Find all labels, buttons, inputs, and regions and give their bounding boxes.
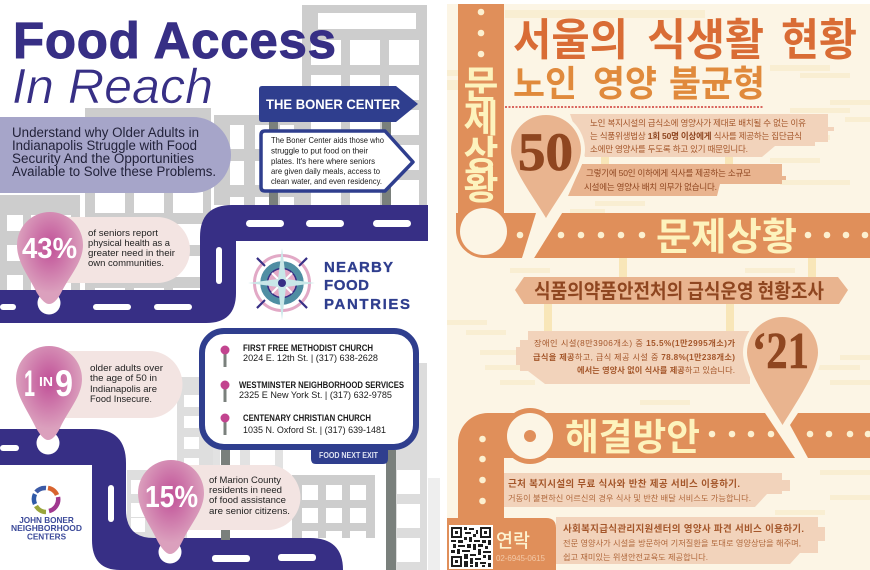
heading: nearby food pantries: PANTRIES xyxy=(324,296,410,313)
pantry: Centenary: 1035 N. Oxford St. | (317) 639-1481 xyxy=(243,425,386,436)
vertical heading: 상 xyxy=(464,124,498,179)
pin: '21 xyxy=(747,317,818,425)
info box: 2021 survey: 급식을 제공하고, 급식 제공 시설 중 78.8%(1만238개소) xyxy=(533,352,735,362)
sign: Boner Center description: are given daily meals, access to xyxy=(271,166,380,176)
logo: John Boner Neighborhood Centers xyxy=(11,488,82,542)
pantry: Westminster: WESTMINSTER NEIGHBORHOOD SERVICES xyxy=(239,380,404,391)
solution box: nearby facilities: 근처 복지시설의 무료 식사와 반찬 제공 서비스 이용하기. xyxy=(508,478,740,490)
solution box: dietitian dispatch xyxy=(556,517,825,564)
intro callout: Indianapolis Struggle with Food xyxy=(12,138,197,153)
stat: 1 in 9: 1 xyxy=(24,363,35,404)
contact block: 02-6945-0615 xyxy=(496,554,546,563)
info box: 2021 survey xyxy=(516,331,750,384)
intro callout xyxy=(0,117,231,193)
sign: The Boner Center: THE BONER CENTER xyxy=(266,96,400,112)
vertical heading: 문 xyxy=(464,54,498,109)
title: 영양 xyxy=(593,55,657,107)
title: In Reach xyxy=(12,60,213,114)
stat: 1 in 9: the age of 50 in xyxy=(90,373,157,384)
background city buildings xyxy=(0,5,440,570)
solution box: dietitian dispatch: 사회복지급식관리지원센터의 영양사 파견 서비스 이용하기. xyxy=(563,523,804,535)
road: upper xyxy=(0,205,428,323)
road heading: 해결방안: 해결방안 xyxy=(565,407,700,461)
solution box: nearby facilities: 거동이 불편하신 어르신의 경우 식사 및 반찬 배달 서비스도 가능합니다. xyxy=(508,493,751,503)
info box: 50-person rule: 노인 복지시설의 급식소에 영양사가 제대로 배치될 수 없는 이유 xyxy=(590,118,806,128)
info box: small facilities: 그렇기에 50인 이하에게 식사를 제공하는 소규모 xyxy=(586,168,751,178)
road: problem section xyxy=(456,4,870,258)
pantry: Westminster xyxy=(220,380,404,402)
stat: 1 in 9: Indianapolis are xyxy=(90,384,157,395)
pin: '21: ‘21 xyxy=(752,323,809,380)
title xyxy=(12,12,336,114)
logo: John Boner Neighborhood Centers: NEIGHBORHOOD xyxy=(11,524,82,533)
solution box: dietitian dispatch: 쉽고 재미있는 위생안전교육도 제공합니다. xyxy=(563,552,708,562)
heading: nearby food pantries: FOOD xyxy=(324,277,369,294)
compass icon xyxy=(248,248,315,320)
intro callout: Understand why Older Adults in xyxy=(12,125,199,140)
road: solution section xyxy=(458,408,870,520)
stat: 15%: are senior citizens. xyxy=(209,506,290,517)
stat: 43%: physical health as a xyxy=(88,238,171,249)
intro callout: Available to Solve these Problems. xyxy=(12,164,216,179)
sign: Boner Center description: struggle to put food on their xyxy=(271,146,368,156)
pantry: First Free Methodist: FIRST FREE METHODIST CHURCH xyxy=(243,343,373,354)
info box: 2021 survey: 에서는 영양사 없이 식사를 제공하고 있습니다. xyxy=(577,365,735,375)
pin: 50 xyxy=(511,115,581,258)
dotted divider xyxy=(505,106,764,108)
stat: 43%: own communities. xyxy=(88,258,164,269)
intro callout: Security And the Opportunities xyxy=(12,151,194,166)
logo: John Boner Neighborhood Centers: JOHN BONER xyxy=(19,516,74,525)
vertical heading xyxy=(464,54,498,210)
sign: Boner Center description: The Boner Center aids those who xyxy=(271,135,384,145)
background streaks xyxy=(447,10,870,515)
pin: 50: 50 xyxy=(518,122,573,182)
road: lower xyxy=(0,429,343,570)
info box: small facilities: 시설에는 영양사 배치 의무가 없습니다. xyxy=(584,182,717,192)
title: 서울의 xyxy=(513,4,628,68)
title: 불균형 xyxy=(669,55,765,107)
pantry: Centenary xyxy=(220,413,386,436)
info box: small facilities xyxy=(568,164,786,196)
stat: 43%: of seniors report xyxy=(88,228,158,239)
solution box: dietitian dispatch: 전문 영양사가 시설을 방문하여 기저질환을 토대로 영양상담을 해주며, xyxy=(563,538,801,548)
stat: 15% xyxy=(138,460,300,564)
info box: 50-person rule xyxy=(570,114,834,157)
title: 노인 xyxy=(513,55,577,107)
stat: 15%: 15% xyxy=(145,479,198,514)
info box: 2021 survey: 장애인 시설(8만3906개소) 중 15.5%(1만2995개소)가 xyxy=(534,338,735,348)
sign: Boner Center description: plates. It's here where seniors xyxy=(271,156,375,166)
stat: 1 in 9 xyxy=(16,346,182,454)
signposts xyxy=(544,157,816,334)
sign: The Boner Center xyxy=(259,86,418,122)
pantry: Centenary: CENTENARY CHRISTIAN CHURCH xyxy=(243,413,371,424)
panel: Food Access in Reach xyxy=(0,0,440,570)
QR code xyxy=(449,525,493,569)
contact block xyxy=(447,518,556,570)
tab: food next exit xyxy=(311,445,388,464)
stat: 1 in 9: 9 xyxy=(55,363,73,404)
solution box: nearby facilities xyxy=(504,473,790,507)
vertical heading: 제 xyxy=(464,88,498,143)
pantry: Westminster: 2325 E New York St. | (317) 632-9785 xyxy=(239,390,392,401)
stat: 15%: of Marion County xyxy=(209,475,281,486)
tab: food next exit: FOOD NEXT EXIT xyxy=(319,451,378,460)
logo: John Boner Neighborhood Centers: CENTERS xyxy=(27,532,67,542)
stat: 1 in 9: Food Insecure. xyxy=(90,394,152,405)
title: Food Access xyxy=(13,12,336,69)
sign: Boner Center description xyxy=(261,131,413,191)
stat: 43% xyxy=(17,212,190,314)
vertical heading: 황 xyxy=(464,155,498,210)
pantry: First Free Methodist xyxy=(220,343,378,367)
title: 현황 xyxy=(781,4,857,68)
info box: 50-person rule: 소에만 영양사를 두도록 하고 있기 때문입니다. xyxy=(590,144,748,154)
info box: 50-person rule: 는 식품위생법상 1회 50명 이상에게 식사를 제공하는 집단급식 xyxy=(590,131,802,141)
pantry: First Free Methodist: 2024 E. 12th St. | (317) 638-2628 xyxy=(243,353,378,364)
heading: nearby food pantries xyxy=(324,259,410,313)
stat: 1 in 9: IN xyxy=(39,374,53,389)
stat: 43%: greater need in their xyxy=(88,248,175,259)
title: 식생활 xyxy=(647,4,764,68)
contact block: 연락 xyxy=(496,526,530,553)
stat: 15%: residents in need xyxy=(209,485,282,496)
banner: 식품의약품안전처: 식품의약품안전처의 급식운영 현황조사 xyxy=(534,275,824,304)
panel: pantry list xyxy=(202,331,416,447)
panel: 서울의 식생활 현황 xyxy=(447,4,870,570)
sign posts xyxy=(221,122,396,570)
stat: 15%: of food assistance xyxy=(209,495,286,506)
stat: 1 in 9: older adults over xyxy=(90,363,163,374)
sign: Boner Center description: clean water, and even residency. xyxy=(271,176,382,186)
stat: 43%: 43% xyxy=(22,233,77,265)
road heading: 문제상황: 문제상황 xyxy=(656,206,797,261)
title xyxy=(513,4,857,107)
heading: nearby food pantries: NEARBY xyxy=(324,259,393,276)
